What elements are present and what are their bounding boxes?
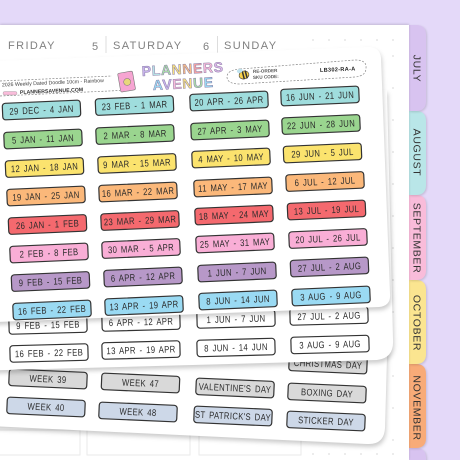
sticker: 19 Jan	[7, 186, 85, 206]
sticker: 29 Dec	[2, 100, 81, 120]
sticker: Christmas Day	[289, 354, 367, 374]
sticker: 9 Mar	[98, 154, 176, 173]
sticker: 11 May: 11 MAY - 17 MAY	[198, 180, 268, 194]
sticker: 11 May	[194, 177, 272, 197]
sheet info strip	[0, 76, 120, 96]
sticker: Valentine's Day	[196, 378, 274, 398]
month index tabs	[409, 25, 426, 460]
sticker: 18 May	[195, 205, 273, 225]
sticker: 23 Feb: 23 FEB - 1 MAR	[101, 99, 168, 112]
sticker: Sticker Day: STICKER DAY	[298, 414, 354, 428]
sticker: 26 Jan: 26 JAN - 1 FEB	[16, 218, 79, 231]
tab: September	[409, 195, 426, 280]
sticker: 9 Feb white: 9 FEB - 15 FEB	[16, 319, 80, 331]
tab: August	[409, 111, 426, 195]
sticker: 4 May: 4 MAY - 10 MAY	[198, 151, 264, 165]
sticker: 1 Jun white: 1 JUN - 7 JUN	[206, 313, 266, 325]
sticker: 8 Jun: 8 JUN - 14 JUN	[206, 293, 270, 307]
sticker: 3 Aug white	[291, 335, 369, 354]
sticker: 25 May: 25 MAY - 31 MAY	[200, 236, 270, 250]
sticker: Week 48	[99, 402, 177, 422]
sticker: 27 Apr	[191, 120, 269, 140]
tab: October	[409, 280, 426, 364]
sticker: Boxing Day	[288, 383, 366, 403]
sticker: 22 Jun	[282, 115, 360, 134]
planner lower cells	[0, 430, 301, 455]
sku label: SKU CODE:	[253, 74, 279, 80]
sticker: 3 Aug	[292, 286, 370, 306]
sticker: 1 Jun	[198, 262, 276, 282]
sticker: 6 Jul: 6 JUL - 12 JUL	[294, 175, 356, 188]
sticker: 13 Jul	[287, 200, 366, 220]
sticker sheet: middle, white labels	[0, 90, 393, 371]
sticker: 2 Feb: 2 FEB - 8 FEB	[19, 246, 79, 260]
date 5: 5	[92, 41, 100, 53]
sticker: 18 May: 18 MAY - 24 MAY	[199, 208, 269, 222]
sticker: 25 May	[196, 233, 274, 253]
logo word: Planners: PLANNERS	[141, 59, 224, 79]
sticker: 23 Mar	[101, 211, 179, 230]
sticker: 27 Jul white	[290, 307, 368, 325]
sticker: 9 Feb: 9 FEB - 15 FEB	[18, 275, 83, 288]
sticker: 3 Aug white: 3 AUG - 9 AUG	[299, 338, 361, 351]
sticker: 27 Jul white: 27 JUL - 2 AUG	[297, 310, 361, 322]
logo icon: notebook	[118, 71, 136, 92]
planner day headings	[8, 36, 277, 53]
sticker: 13 Jul: 13 JUL - 19 JUL	[294, 203, 359, 217]
tab: August: AUGUST	[410, 129, 422, 176]
sticker: 2 Mar: 2 MAR - 8 MAR	[103, 128, 167, 141]
sticker: 8 Jun	[199, 290, 277, 310]
sticker: Christmas Day: CHRISTMAS DAY	[294, 357, 362, 371]
sticker: 13 Apr white	[102, 341, 180, 359]
sticker: 4 May	[192, 148, 270, 168]
re-order pill	[227, 60, 366, 84]
heading: Sunday: SUNDAY	[224, 40, 277, 52]
sticker sheet: top, rainbow labels	[0, 47, 390, 323]
sticker: 2 Feb	[10, 243, 88, 263]
sticker: Sticker Day	[287, 411, 365, 431]
sticker: 23 Mar: 23 MAR - 29 MAR	[104, 213, 176, 228]
sticker: 19 Jan: 19 JAN - 25 JAN	[12, 189, 80, 203]
sticker: 16 Jun	[281, 86, 359, 106]
sticker: 16 Feb: 16 FEB - 22 FEB	[18, 303, 86, 317]
date 6: 6	[203, 41, 211, 53]
sticker: 2 Mar	[96, 125, 174, 144]
sticker: 5 Jan	[4, 129, 82, 149]
sticker: 27 Jul: 27 JUL - 2 AUG	[298, 260, 361, 274]
tab: November: NOVEMBER	[410, 375, 422, 441]
sticker: 5 Jan: 5 JAN - 11 JAN	[12, 132, 74, 146]
sticker: 30 Mar	[102, 239, 180, 258]
sku code: LB302-RA-A	[320, 66, 356, 74]
sticker: 23 Feb	[95, 96, 174, 115]
heading: Friday: FRIDAY	[8, 40, 56, 52]
icon: bee	[236, 67, 250, 80]
sticker: St Patrick's Day: ST PATRICK'S DAY	[195, 409, 271, 423]
product name: 2026 Weekly Dated Doodle 10cm - Rainbow	[2, 78, 104, 88]
sticker sheet: bottom, neutral labels	[0, 300, 388, 444]
sticker: 20 Apr	[190, 91, 268, 111]
sticker: 12 Jan	[5, 158, 84, 177]
heading: Saturday: SATURDAY	[113, 40, 182, 52]
sticker: 29 Jun	[283, 143, 362, 163]
logo word: Avenue: AVENUE	[152, 74, 214, 93]
sticker: Week 47	[101, 373, 180, 393]
sticker: Week 48: WEEK 48	[119, 406, 157, 418]
sticker: 22 Jun: 22 JUN - 28 JUN	[287, 117, 355, 131]
sticker: 12 Jan: 12 JAN - 18 JAN	[11, 161, 78, 174]
sticker: 9 Feb	[11, 272, 90, 291]
sticker: 30 Mar: 30 MAR - 5 APR	[108, 242, 174, 255]
tab: July	[409, 25, 426, 111]
sticker: 16 Jun: 16 JUN - 21 JUN	[286, 89, 354, 103]
sticker: 20 Jul	[289, 229, 367, 248]
sticker: Week 39	[9, 369, 87, 389]
sticker: 6 Apr	[104, 267, 182, 287]
sticker: 13 Apr: 13 APR - 19 APR	[109, 298, 179, 313]
sticker: 8 Jun white: 8 JUN - 14 JUN	[204, 341, 268, 354]
sticker: 6 Apr: 6 APR - 12 APR	[111, 270, 175, 284]
sticker: 16 Feb white	[10, 344, 88, 362]
sticker: 16 Mar	[99, 182, 177, 202]
sticker: 16 Mar: 16 MAR - 22 MAR	[102, 185, 174, 199]
sticker: Boxing Day: BOXING DAY	[301, 386, 353, 400]
sticker: 3 Aug: 3 AUG - 9 AUG	[300, 289, 362, 303]
sticker: Week 47: WEEK 47	[122, 377, 159, 389]
sticker: 20 Apr: 20 APR - 26 APR	[194, 94, 264, 108]
tab: December	[409, 448, 426, 460]
sticker: 9 Feb white	[9, 316, 87, 334]
sticker: Week 39: WEEK 39	[29, 373, 67, 385]
re-order label: RE-ORDER	[253, 68, 278, 74]
sticker: 27 Apr: 27 APR - 3 MAY	[197, 123, 263, 137]
sticker: 6 Apr white	[102, 313, 180, 331]
sticker: 16 Feb	[13, 300, 91, 320]
sticker: Week 40	[7, 397, 85, 417]
sticker: 29 Jun: 29 JUN - 5 JUL	[291, 146, 354, 160]
logo: Planners Avenue	[141, 59, 224, 93]
color swatch	[3, 92, 17, 95]
sticker: Valentine's Day: VALENTINE'S DAY	[198, 381, 272, 395]
sticker: Week 40: WEEK 40	[27, 401, 65, 413]
sticker: 1 Jun: 1 JUN - 7 JUN	[207, 265, 267, 279]
sticker: 20 Jul: 20 JUL - 26 JUL	[295, 232, 361, 245]
tab: July: JULY	[410, 55, 422, 82]
website: PLANNERSAVENUE.COM	[20, 87, 83, 96]
sticker: 13 Apr white: 13 APR - 19 APR	[106, 344, 176, 356]
sticker: 29 Dec: 29 DEC - 4 JAN	[9, 103, 74, 117]
tab: September: SEPTEMBER	[410, 203, 422, 273]
sticker: 16 Feb white: 16 FEB - 22 FEB	[15, 347, 83, 359]
sticker: 6 Apr white: 6 APR - 12 APR	[109, 316, 173, 328]
sticker: 6 Jul	[286, 172, 364, 191]
tab: October: OCTOBER	[410, 295, 422, 351]
sticker: 1 Jun white	[197, 310, 275, 328]
sticker: 9 Mar: 9 MAR - 15 MAR	[103, 156, 171, 170]
sticker: 13 Apr	[105, 296, 183, 315]
sticker: 26 Jan	[8, 215, 87, 234]
sticker: 8 Jun white	[197, 338, 275, 357]
tab: November	[409, 364, 426, 448]
planner dot grid	[312, 39, 394, 455]
sticker: 27 Jul	[290, 257, 369, 277]
